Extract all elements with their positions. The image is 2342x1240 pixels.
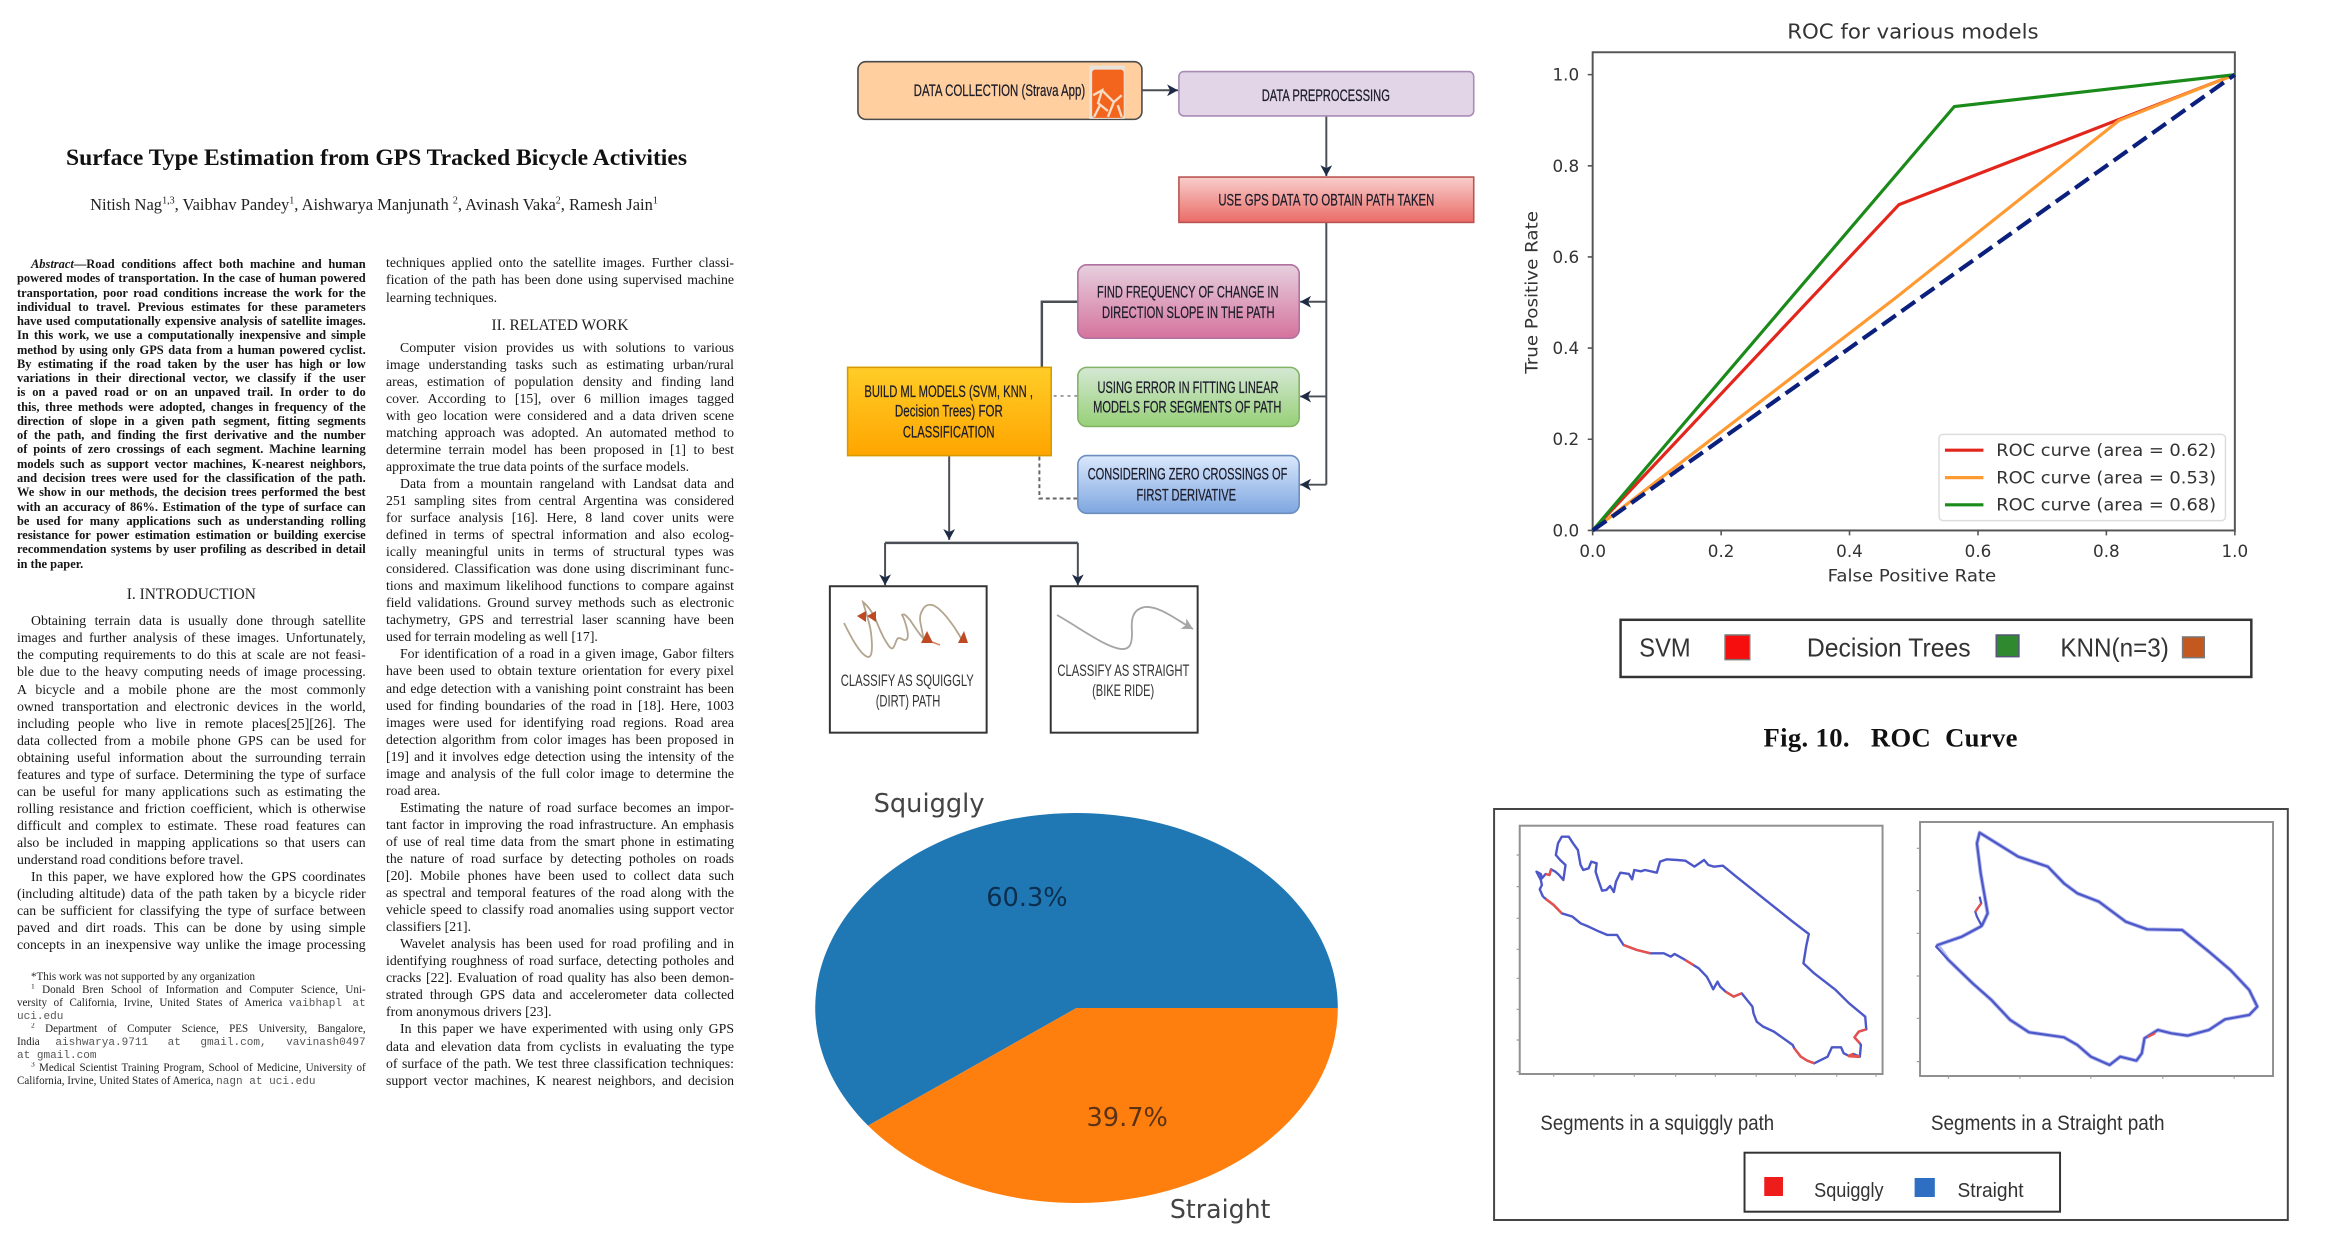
text block: related work: classifiers [21]. xyxy=(386,919,471,934)
text block: related work: approximate the true data points of the surface models. xyxy=(386,459,689,474)
plot frame and axes: 1.0 xyxy=(1553,65,1579,85)
text block: footnotes: *This work was not supported by any organization xyxy=(31,970,255,982)
heading: introduction: I. INTRODUCTION xyxy=(127,586,256,603)
text block: related work: considered. Classification was done using discriminant func- xyxy=(386,561,734,576)
text block: related work: areas, estimation of population density and finding land xyxy=(386,374,734,389)
paper title: Surface Type Estimation from GPS Tracked Bicycle Activities xyxy=(66,145,687,171)
label: squiggly: Squiggly xyxy=(874,789,985,819)
slice: straight xyxy=(868,1008,1338,1203)
text block: column two opening: techniques applied onto the satellite images. Further classi- xyxy=(386,255,734,270)
text block: related work: have been used to obtain texture orientation for every pixel xyxy=(386,663,734,678)
map legend xyxy=(1745,1153,2060,1212)
text block: related work: images were used for identifying road regions. Road area xyxy=(386,715,734,730)
box: classify as squiggly: CLASSIFY AS SQUIGGLY xyxy=(841,672,974,690)
map: straight path xyxy=(1917,822,2273,1079)
text block: abstract: variations in their directional vector, we classify if the user xyxy=(17,371,366,385)
text block: related work: matching approach was adopted. An automated method to xyxy=(386,425,734,440)
figure caption: Fig. 10. ROC Curve xyxy=(1764,722,2018,752)
text block: footnotes: at gmail.com xyxy=(17,1050,97,1062)
plot frame and axes: 1.0 xyxy=(2222,541,2248,561)
box: classify as squiggly xyxy=(830,586,987,733)
text block: related work: For identification of a road in a given image, Gabor filters xyxy=(400,646,734,661)
text block: related work: 251 sampling sites from central Argentina was considered xyxy=(386,493,734,508)
text block: abstract: of points of zero crossings of each segment. Machine learning xyxy=(17,442,366,456)
text block: introduction: the computing requirements to do this at scale are not feasi- xyxy=(17,647,366,662)
text block: related work: of surface of the path. We test three classification techniques: xyxy=(386,1056,734,1071)
text block: abstract: is on a paved road or on an unpaved trail. In order to do xyxy=(17,385,366,399)
text block: related work: as spectral and temporal features of the road along with the xyxy=(386,885,734,900)
text block: abstract: in the paper. xyxy=(17,557,83,571)
text block: introduction: understand road conditions before travel. xyxy=(17,852,243,867)
panel: segment maps xyxy=(1494,809,2288,1220)
value: 60.3%: 60.3% xyxy=(986,883,1068,913)
text block: related work: [20]. Mobile phones have been used to collect data such xyxy=(386,868,734,883)
map legend: Squiggly xyxy=(1814,1180,1884,1202)
plot frame and axes: 0.8 xyxy=(2093,541,2120,561)
box: build ml models: BUILD ML MODELS (SVM, KNN , xyxy=(864,382,1033,401)
text block: related work: [19] and it involves edge detection using the intensity of the xyxy=(386,749,734,764)
text block: introduction: can be useful for many applications such as estimating the xyxy=(17,784,366,799)
text block: introduction: concepts in an inexpensive way unlike the image processing xyxy=(17,937,366,952)
text block: abstract: In this work, we use a computationally inexpensive and simple xyxy=(17,328,366,342)
box: frequency of change: FIND FREQUENCY OF CHANGE IN xyxy=(1097,282,1278,301)
box: classify as straight: CLASSIFY AS STRAIGHT xyxy=(1057,662,1189,680)
text block: column two opening xyxy=(386,255,734,305)
text block: footnotes xyxy=(17,970,366,1088)
text block: abstract: have used computationally expensive analysis of satellite images. xyxy=(17,314,366,328)
box: data preprocessing: DATA PREPROCESSING xyxy=(1262,86,1390,105)
text block: related work: Estimating the nature of road surface becomes an impor- xyxy=(400,800,734,815)
text block: abstract: recommendation systems by user profiling as described in detail xyxy=(17,542,366,556)
box: build ml models xyxy=(848,367,1051,456)
text block: abstract: individual to travel. Previous estimates for these parameters xyxy=(17,300,366,314)
text block: column two opening: learning techniques. xyxy=(386,290,497,305)
model colour legend xyxy=(1621,620,2251,677)
map: squiggly path xyxy=(1517,826,1883,1077)
plot frame and axes: 0.8 xyxy=(1553,156,1579,176)
x axis label: False Positive Rate xyxy=(1828,566,1996,586)
plot frame and axes: 0.6 xyxy=(1965,541,1991,561)
text block: related work: strated through GPS data and accelerometer data collected xyxy=(386,987,734,1002)
box: zero crossings xyxy=(1078,456,1299,513)
chart legend: ROC curve (area = 0.68) xyxy=(1996,495,2216,515)
text block: abstract: Abstract—Road conditions affect both machine and human xyxy=(31,257,366,271)
value: 39.7%: 39.7% xyxy=(1087,1103,1168,1133)
plot frame and axes xyxy=(1553,52,2248,561)
text block: introduction: including people who live in remote places[25][26]. The xyxy=(17,716,366,731)
text block: introduction: rolling resistance and friction coefficient, which is otherwise xyxy=(17,801,366,816)
text block: abstract: and decision trees were used for the classification of the path. xyxy=(17,471,366,485)
text block: introduction: ble due to the heavy computing needs of image processing. xyxy=(17,664,366,679)
plot frame and axes: 0.0 xyxy=(1553,520,1579,540)
text block: introduction: (including altitude) data of the path taken by a bicycle rider xyxy=(17,886,366,901)
text block: related work xyxy=(386,340,734,1088)
text block: related work: support vector machines, K nearest neighbors, and decision xyxy=(386,1073,734,1088)
text block: abstract: with an accuracy of 86%. Estimation of the type of surface can xyxy=(17,500,366,514)
roc chart xyxy=(1522,19,2251,752)
box: zero crossings: FIRST DERIVATIVE xyxy=(1137,485,1236,504)
text block: introduction: also be included in mapping applications so that users can xyxy=(17,835,366,850)
label: straight: Straight xyxy=(1170,1195,1270,1225)
text block: related work: data and elevation data from cyclists in evaluating the type xyxy=(386,1039,734,1054)
pie chart xyxy=(815,789,1338,1225)
text block: introduction: owned transportation and electronic devices in the world, xyxy=(17,699,366,714)
text block: footnotes: uci.edu xyxy=(17,1010,63,1022)
text block: introduction xyxy=(17,613,366,952)
box: error in linear fit xyxy=(1078,367,1299,427)
box: frequency of change: DIRECTION SLOPE IN THE PATH xyxy=(1102,303,1275,322)
connector lines xyxy=(885,90,1326,585)
text block: abstract: transportation, poor road conditions increase the work for the xyxy=(17,286,366,300)
icon: strava app xyxy=(1089,66,1125,119)
text block: related work: Wavelet analysis has been used for road profiling and in xyxy=(400,936,734,951)
box: use gps data: USE GPS DATA TO OBTAIN PATH TAKEN xyxy=(1218,191,1434,210)
text block: abstract xyxy=(17,257,366,571)
text block: related work: cover. According to [15], over 6 million images tagged xyxy=(386,391,734,406)
box: error in linear fit: USING ERROR IN FITTING LINEAR xyxy=(1098,378,1278,397)
text block: introduction: In this paper, we have explored how the GPS coordinates xyxy=(31,869,366,884)
text block: related work: field validations. Ground survey methods such as electronic xyxy=(386,595,734,610)
text block: introduction: data collected from a mobile phone GPS can be used for xyxy=(17,733,366,748)
text block: abstract: By estimating if the road taken by the user has high or low xyxy=(17,357,366,371)
text block: introduction: difficult and complex to estimate. These road features can xyxy=(17,818,366,833)
text block: related work: Data from a mountain rangeland with Landsat data and xyxy=(400,476,734,491)
plot frame and axes: 0.4 xyxy=(1553,338,1579,358)
text block: related work: vehicle speed to classify road anomalies using support vector xyxy=(386,902,734,917)
slice: squiggly xyxy=(815,813,1338,1126)
text block: related work: for surface analysis [16]. Here, 8 land cover units were xyxy=(386,510,734,525)
text block: related work: identifying roughness of road surface, detecting potholes and xyxy=(386,953,734,968)
box: use gps data xyxy=(1179,177,1474,222)
flowchart xyxy=(830,62,1474,733)
text block: related work: tions and maximum likelihood functions to compare against xyxy=(386,578,734,593)
text block: related work: from anonymous drivers [23]. xyxy=(386,1004,552,1019)
text block: introduction: can be sufficient for classifying the type of surface between xyxy=(17,903,366,918)
text block: footnotes: California, Irvine, United States of America, nagn at uci.edu xyxy=(17,1074,316,1088)
plot frame and axes: 0.6 xyxy=(1553,247,1579,267)
text block: related work: determine terrain model has been proposed in [1] to best xyxy=(386,442,734,457)
icon: straight path xyxy=(1057,607,1193,649)
text block: introduction: A bicycle and a mobile phone are the most commonly xyxy=(17,682,366,697)
box: classify as squiggly: (DIRT) PATH xyxy=(876,693,940,711)
icon: squiggly path xyxy=(844,602,968,657)
box: error in linear fit: MODELS FOR SEGMENTS OF PATH xyxy=(1093,398,1281,417)
text block: abstract: powered modes of transportation. In the case of human powered xyxy=(17,271,366,285)
box: classify as straight: (BIKE RIDE) xyxy=(1092,682,1154,700)
heading: related work: II. RELATED WORK xyxy=(492,317,628,334)
text block: introduction: paved and dirt roads. This can be done by using simple xyxy=(17,920,366,935)
text block: related work: tachymetry, GPS and terrestrial laser scanning have been xyxy=(386,612,734,627)
roc curves xyxy=(1593,75,2235,530)
model colour legend: SVM xyxy=(1639,635,1691,663)
box: frequency of change xyxy=(1078,265,1299,338)
y axis label: True Positive Rate xyxy=(1522,211,1542,375)
plot frame and axes: 0.2 xyxy=(1553,429,1579,449)
text block: introduction: images and further analysis of these images. Unfortunately, xyxy=(17,630,366,645)
caption: straight map: Segments in a Straight path xyxy=(1931,1112,2165,1135)
text block: abstract: of the path, and finding the first derivative and the number xyxy=(17,428,366,442)
text block: related work: image and analysis of the full color image to determine the xyxy=(386,766,734,781)
model colour legend: KNN(n=3) xyxy=(2060,635,2169,663)
plot frame and axes: 0.0 xyxy=(1579,541,1606,561)
box: data collection xyxy=(858,62,1142,119)
text block: related work: Computer vision provides us with solutions to various xyxy=(400,340,734,355)
text block: abstract: this, three methods were adopted, changes in frequency of the xyxy=(17,400,366,414)
text block: introduction: obtaining useful information about the surrounding terrain xyxy=(17,750,366,765)
text block: abstract: be used for many applications such as understanding rolling xyxy=(17,514,366,528)
text block: abstract: We show in our methods, the decision trees performed the best xyxy=(17,485,366,499)
text block: introduction: features and type of surface. Determining the type of surface xyxy=(17,767,366,782)
model colour legend: Decision Trees xyxy=(1807,635,1971,663)
plot frame and axes: 0.4 xyxy=(1836,541,1863,561)
text block: related work: cracks [22]. Evaluation of road quality has also been demon- xyxy=(386,970,734,985)
box: zero crossings: CONSIDERING ZERO CROSSINGS OF xyxy=(1088,465,1287,484)
text block: column two opening: fication of the path has been done using supervised machine xyxy=(386,272,734,287)
box: data collection: DATA COLLECTION (Strava App) xyxy=(914,81,1085,100)
box: build ml models: Decision Trees) FOR xyxy=(895,402,1003,421)
plot frame and axes: 0.2 xyxy=(1708,541,1734,561)
box: build ml models: CLASSIFICATION xyxy=(903,422,995,441)
map legend: Straight xyxy=(1958,1180,2024,1202)
text block: related work: ically meaningful units in terms of structural types was xyxy=(386,544,734,559)
chart legend: ROC curve (area = 0.53) xyxy=(1996,468,2216,488)
text block: abstract: direction of slope in a given path segment, fitting segments xyxy=(17,414,366,428)
box: classify as straight xyxy=(1051,586,1198,733)
caption: squiggly map: Segments in a squiggly path xyxy=(1540,1112,1774,1135)
text block: abstract: models such as support vector machines, K-nearest neighbors, xyxy=(17,457,366,471)
text block: related work: image understanding tasks such as estimating urban/rural xyxy=(386,357,734,372)
text block: footnotes: India aishwarya.9711 at gmail.com, vavinash0497 xyxy=(17,1036,366,1048)
text block: related work: used for terrain modeling as well [17]. xyxy=(386,629,598,644)
chart legend xyxy=(1939,434,2225,521)
text block: related work: and edge detection with a vanishing point constraint has been xyxy=(386,681,734,696)
paper authors: Nitish Nag1,3, Vaibhav Pandey1, Aishwarya Manjunath 2, Avinash Vaka2, Ramesh Jain1 xyxy=(90,195,658,214)
chart title: ROC for various models xyxy=(1787,19,2039,43)
text block: related work: tant factor in improving the road infrastructure. An emphasis xyxy=(386,817,734,832)
text block: footnotes: versity of California, Irvine, United States of America vaibhapl at xyxy=(17,996,366,1010)
text block: introduction: Obtaining terrain data is usually done through satellite xyxy=(31,613,366,628)
text block: related work: of use of real time data from the smart phone in estimating xyxy=(386,834,734,849)
text block: related work: defined in terms of spectral information and also ecolog- xyxy=(386,527,734,542)
chart legend: ROC curve (area = 0.62) xyxy=(1996,440,2216,460)
text block: related work: with geo location were considered and a data driven scene xyxy=(386,408,734,423)
text block: related work: used for finding boundaries of the road in [18]. Here, 1003 xyxy=(386,698,734,713)
box: data preprocessing xyxy=(1179,72,1474,116)
text block: related work: detection algorithm from color images has been proposed in xyxy=(386,732,734,747)
text block: related work: road area. xyxy=(386,783,440,798)
text block: related work: In this paper we have experimented with using only GPS xyxy=(400,1021,734,1036)
text block: abstract: resistance for power estimation estimation or building exercise xyxy=(17,528,366,542)
text block: abstract: method by using only GPS data from a human powered cyclist. xyxy=(17,343,366,357)
text block: related work: the nature of road surface by detecting potholes on roads xyxy=(386,851,734,866)
